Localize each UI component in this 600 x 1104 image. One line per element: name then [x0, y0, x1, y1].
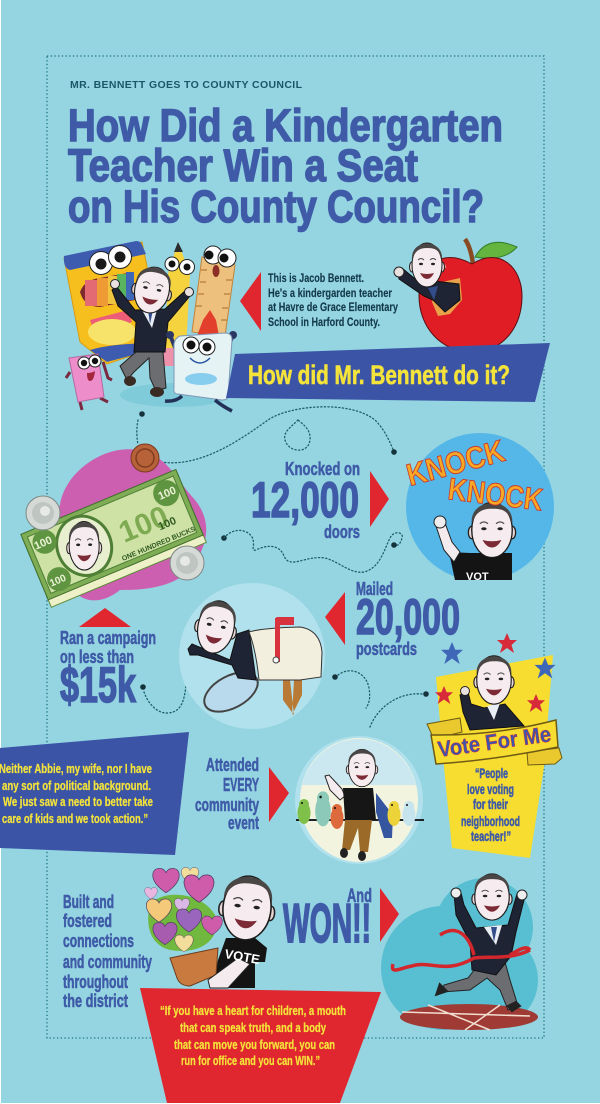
stat: campaign under $15k: on less than: [60, 647, 134, 667]
crayon box: [64, 241, 163, 364]
stack of bills: 100: [157, 485, 178, 503]
quote box: no political background: Neither Abbie, my wife, nor I have: [0, 762, 152, 776]
title: on His County Council?: [68, 181, 484, 232]
arrow: left: [325, 592, 345, 645]
illustration: Mr. Bennett with school supply characters: [64, 241, 237, 411]
quote box: heart for children: “If you have a heart for children, a mouth: [160, 1004, 346, 1018]
dotted connector paths: [137, 407, 429, 727]
stat: campaign under $15k: Ran a campaign: [60, 628, 156, 648]
stat: And WON!!: WON!!: [283, 892, 371, 954]
quote box: no political background: any sort of political background.: [2, 779, 151, 793]
text: built connections: the district: [63, 991, 128, 1011]
glue bottle: [165, 310, 237, 411]
text: built connections: connections: [63, 931, 134, 951]
arrow: right: [380, 888, 399, 942]
stars: [435, 633, 556, 712]
stat: attended every community event: Attended: [206, 755, 259, 775]
banner: How did Mr. Bennett do it?: [226, 343, 550, 402]
arrow: left: [240, 272, 261, 331]
arrow: right: [269, 767, 289, 822]
stack of bills: 100: [32, 534, 54, 552]
eraser: [66, 354, 112, 410]
silver coin right: [170, 546, 204, 580]
quote: love voting: [467, 781, 514, 797]
quote: [461, 765, 520, 844]
kicker: MR. BENNETT GOES TO COUNTY COUNCIL: [70, 79, 303, 91]
title: How Did a Kindergarten: [68, 100, 503, 151]
quote: “People: [475, 765, 508, 781]
banner: How did Mr. Bennett do it?: How did Mr. Bennett do it?: [248, 360, 510, 390]
quote box: heart for children: [140, 988, 381, 1103]
illustration: Mr. Bennett in an apple: [394, 239, 522, 352]
stat: attended every community event: event: [228, 813, 259, 833]
text: built connections: Built and: [63, 892, 114, 912]
quote box: no political background: We just saw a need to better take: [3, 795, 153, 809]
ruler: [192, 246, 236, 336]
illustration: Knock Knock circle: KNOCK: [446, 471, 545, 518]
text: intro: He's a kindergarden teacher: [268, 286, 392, 300]
silver coin left: [26, 496, 60, 530]
quote: for their: [473, 796, 508, 812]
quote box: heart for children: that can speak truth, and a body: [180, 1021, 326, 1035]
illustration: Knock Knock circle: VOT: [466, 571, 489, 583]
illustration: Vote For Me poster: [427, 633, 562, 858]
illustration: Mr. Bennett with heart plant: VOTE: [223, 946, 261, 967]
stat: 12,000 doors: [251, 459, 360, 542]
stat: 12,000 doors: Knocked on: [285, 459, 360, 479]
illustration: Knock Knock circle: [403, 433, 554, 585]
arrow: up: [79, 608, 131, 627]
hearts: [145, 867, 222, 952]
stat: 20,000 postcards: 20,000: [356, 589, 460, 645]
quote box: no political background: care of kids and we took action.”: [2, 812, 148, 826]
title: Teacher Win a Seat: [68, 140, 418, 191]
stack of bills: ONE HUNDRED BUCKS: [121, 526, 197, 563]
text: intro: at Havre de Grace Elementary: [268, 300, 398, 314]
stat: 12,000 doors: doors: [324, 522, 360, 542]
quote box: heart for children: run for office and you can WIN.”: [181, 1054, 320, 1068]
stat: 20,000 postcards: Mailed: [356, 579, 393, 599]
stat: 12,000 doors: 12,000: [251, 472, 359, 528]
stat: 20,000 postcards: [356, 579, 460, 659]
running track: [400, 1004, 538, 1030]
stat: And WON!!: And: [347, 886, 372, 907]
ribbon: Vote For Me: [436, 721, 553, 762]
text: built connections: fostered: [63, 911, 112, 931]
stat: attended every community event: EVERY: [223, 775, 259, 795]
finish ribbon: [392, 931, 530, 970]
text: built connections: [63, 892, 152, 1011]
illustration: Mr. Bennett with birds on a wire: [295, 736, 424, 864]
stat: attended every community event: [195, 755, 259, 833]
text: intro: School in Harford County.: [268, 315, 380, 329]
stat: And WON!!: [283, 886, 372, 954]
text: built connections: and community: [63, 952, 152, 972]
stat: campaign under $15k: [60, 628, 156, 713]
quote box: heart for children: that can move you forward, you can: [174, 1038, 335, 1052]
stack of bills: 100: [48, 573, 68, 589]
quote: neighborhood: [461, 813, 520, 829]
illustration: Mr. Bennett and mailbox: [179, 583, 325, 729]
illustration: Mr. Bennett crossing the finish line: [381, 874, 538, 1030]
illustration: Mr. Bennett with heart plant: [145, 867, 278, 988]
pencil: [163, 242, 194, 366]
illustration: money on a pink blob: [21, 444, 206, 607]
quote: teacher!”: [471, 828, 511, 844]
stat: attended every community event: community: [195, 795, 259, 815]
quote box: no political background: [0, 732, 189, 855]
stack of bills: [21, 470, 206, 607]
stack of bills: 100: [114, 500, 173, 550]
text: built connections: throughout: [63, 972, 128, 992]
stat: 20,000 postcards: postcards: [356, 639, 417, 659]
penny: [131, 444, 159, 472]
stack of bills: 100: [157, 515, 178, 533]
text: intro: This is Jacob Bennett.: [268, 271, 364, 285]
illustration: Knock Knock circle: KNOCK: [403, 433, 509, 493]
stat: campaign under $15k: $15k: [60, 657, 136, 713]
text: intro: [268, 271, 398, 329]
Mr. Bennett jumping: [110, 263, 194, 397]
title: [68, 100, 503, 232]
arrow: right: [370, 471, 389, 527]
